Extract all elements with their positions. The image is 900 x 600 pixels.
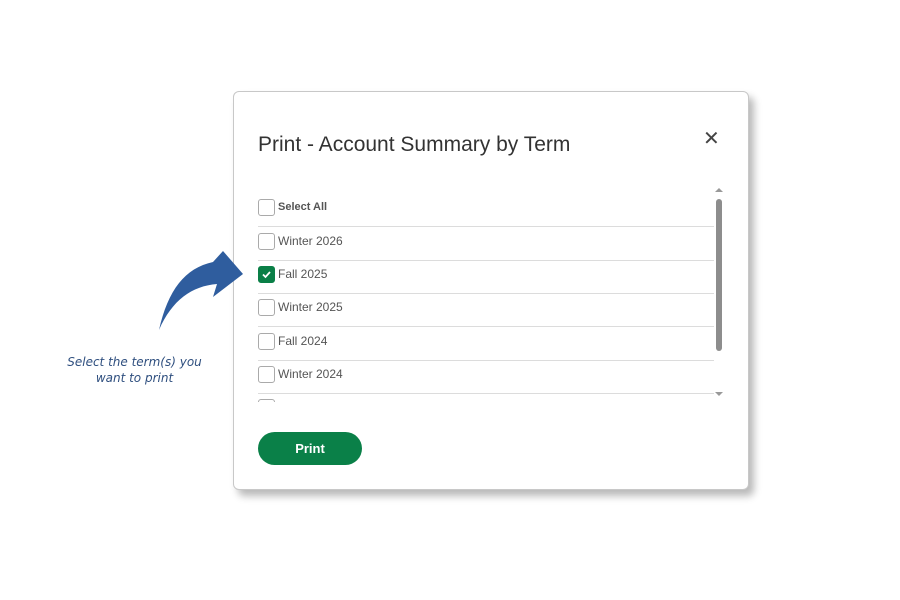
scrollbar bbox=[715, 188, 723, 396]
row: winter 2026: Winter 2026 bbox=[278, 234, 343, 248]
title: Print - Account Summary by Term bbox=[258, 133, 570, 156]
row: winter 2025: Winter 2025 bbox=[278, 300, 343, 314]
button: print: Print bbox=[295, 441, 325, 456]
list: terms bbox=[258, 199, 714, 402]
row: winter 2024: Winter 2024 bbox=[278, 367, 343, 381]
row: fall 2024: Fall 2024 bbox=[278, 334, 327, 348]
row: fall 2023 partial bbox=[258, 393, 714, 427]
icon: close: ✕ bbox=[703, 128, 720, 150]
callout text: Select the term(s) you want to print bbox=[67, 355, 202, 385]
row: select all bbox=[258, 193, 714, 227]
row: winter 2024 bbox=[258, 360, 714, 394]
row: fall 2024 bbox=[258, 327, 714, 361]
row: fall 2025 checked bbox=[258, 260, 714, 294]
row: select all: Select All bbox=[278, 201, 327, 213]
button: print bbox=[258, 432, 362, 465]
row: winter 2026 bbox=[258, 227, 714, 261]
row: winter 2025 bbox=[258, 293, 714, 327]
row: fall 2025 checked: Fall 2025 bbox=[278, 267, 327, 281]
modal: print dialog bbox=[233, 91, 749, 490]
